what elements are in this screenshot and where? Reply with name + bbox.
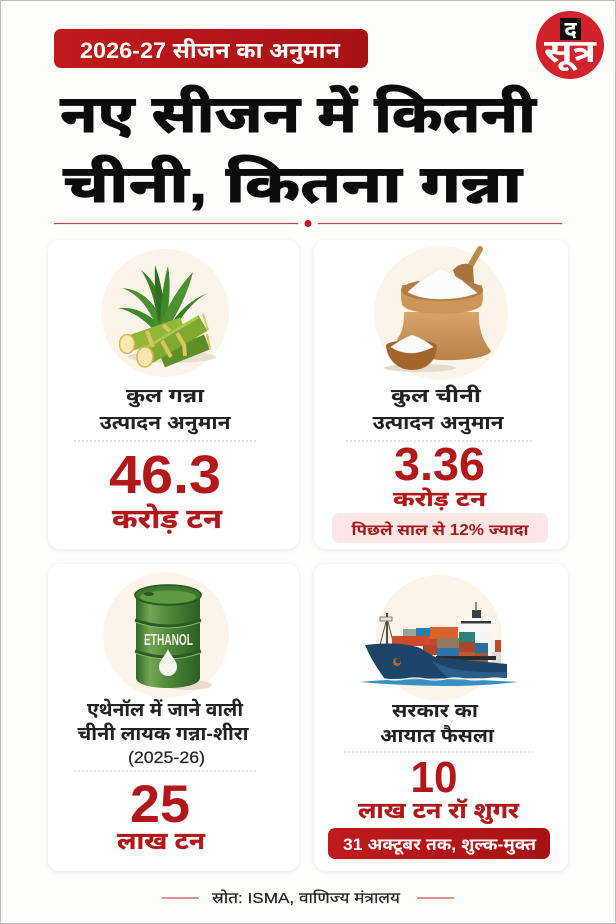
value: 3.36 [394, 438, 485, 490]
icon: ethanol barrel: ETHANOL [144, 632, 193, 649]
label: उत्पादन अनुमान [100, 413, 231, 435]
panel: import decision [314, 564, 568, 871]
value [109, 445, 224, 534]
value [117, 775, 206, 855]
source footer: स्रोत: ISMA, वाणिज्य मंत्रालय [212, 890, 400, 907]
value [358, 753, 520, 824]
label: एथेनॉल में जाने वाली [87, 698, 243, 721]
logo: द [564, 17, 577, 42]
value: करोड़ टन [112, 504, 224, 534]
label [78, 698, 249, 767]
label: चीनी लायक गन्ना-शीरा [78, 723, 249, 745]
header tag [54, 29, 368, 68]
title: नए सीजन में कितनी [60, 85, 538, 144]
label [372, 385, 504, 435]
logo: सूत्र [544, 33, 597, 71]
label: आयात फैसला [380, 724, 494, 747]
label: कुल चीनी [391, 385, 482, 408]
value: लाख टन रॉ शुगर [358, 798, 520, 824]
header tag: 2026-27 सीजन का अनुमान [80, 38, 341, 64]
value: 10 [410, 753, 458, 802]
callout: growth: पिछले साल से 12% ज्यादा [352, 520, 529, 539]
icon: sugar sack [374, 246, 508, 380]
label: उत्पादन अनुमान [372, 413, 504, 435]
value: लाख टन [117, 828, 206, 855]
panel: ethanol [48, 564, 299, 871]
title divider [54, 220, 562, 227]
logo [536, 11, 604, 79]
icon: ethanol barrel [103, 572, 229, 698]
icon: sugarcane [101, 249, 229, 377]
callout: growth [332, 513, 548, 543]
label: (2025-26) [128, 748, 205, 767]
label: कुल गन्ना [126, 386, 204, 408]
label [380, 701, 494, 747]
value [393, 438, 487, 511]
value: 46.3 [109, 445, 221, 505]
callout: duty free: 31 अक्टूबर तक, शुल्क-मुक्त [343, 836, 537, 855]
callout: duty free [328, 828, 550, 859]
label: सरकार का [392, 701, 478, 722]
icon: cargo ship [360, 575, 518, 701]
label [100, 386, 231, 435]
title: चीनी, कितना गन्ना [63, 156, 524, 214]
title [60, 85, 538, 214]
value: करोड़ टन [393, 487, 487, 511]
panel: sugarcane production [48, 240, 299, 549]
panel: sugar production [314, 240, 568, 549]
value: 25 [130, 775, 190, 834]
